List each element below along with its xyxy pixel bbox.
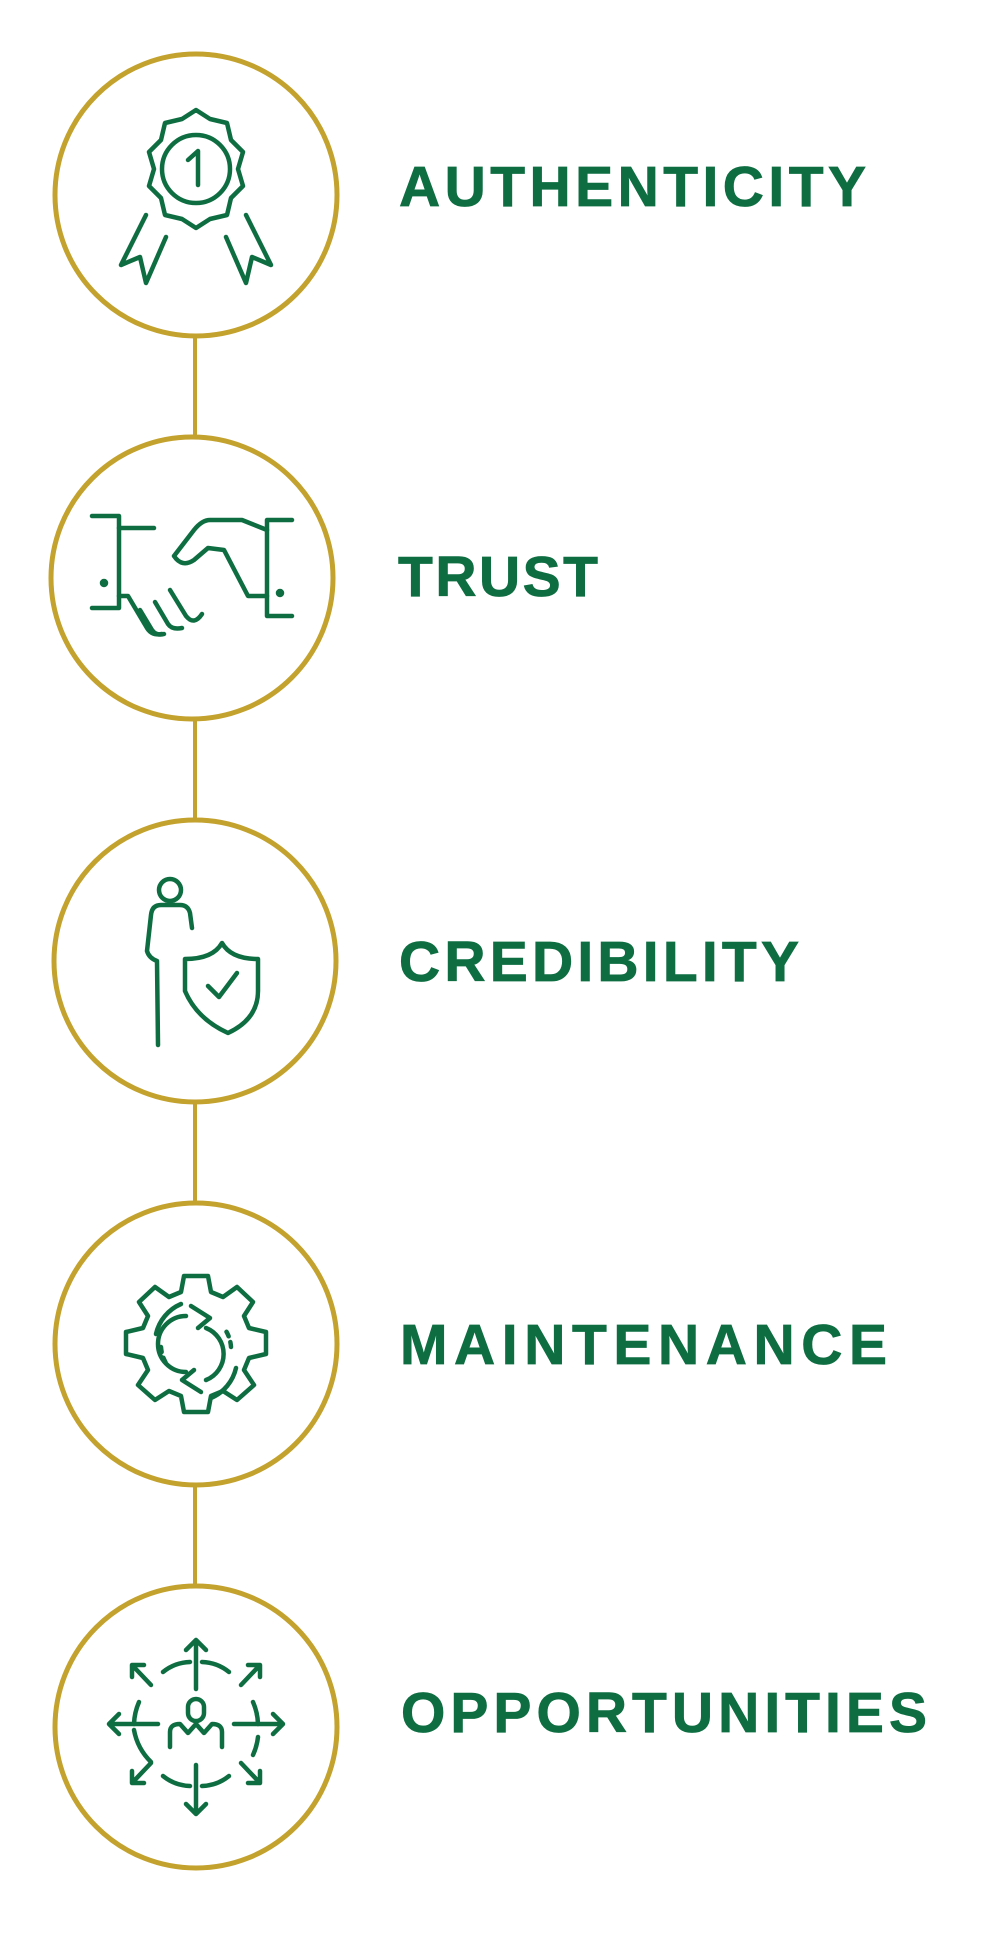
icon: handshake: [92, 516, 292, 634]
step 1: authenticity: [55, 54, 866, 336]
circle: credibility: [54, 820, 336, 1102]
heading: credibility: CREDIBILITY: [399, 930, 799, 994]
step 2: trust: [51, 437, 598, 719]
heading: maintenance: MAINTENANCE: [400, 1313, 887, 1377]
step 3: credibility: [54, 820, 799, 1102]
connector lines: [193, 336, 197, 1586]
icon: person with shield: [147, 879, 258, 1045]
circle: trust: [51, 437, 333, 719]
icon: gear with cycle arrows: [126, 1276, 266, 1412]
circle: authenticity: [55, 54, 337, 336]
heading: trust: TRUST: [398, 545, 598, 609]
circle: opportunities: [55, 1586, 337, 1868]
circle: maintenance: [55, 1203, 337, 1485]
heading: opportunities: OPPORTUNITIES: [401, 1681, 927, 1745]
step 4: maintenance: [55, 1203, 887, 1485]
icon: person with radiating arrows: [109, 1640, 283, 1814]
icon: award ribbon: [121, 110, 271, 283]
step 5: opportunities: [55, 1586, 927, 1868]
heading: authenticity: AUTHENTICITY: [399, 155, 866, 219]
